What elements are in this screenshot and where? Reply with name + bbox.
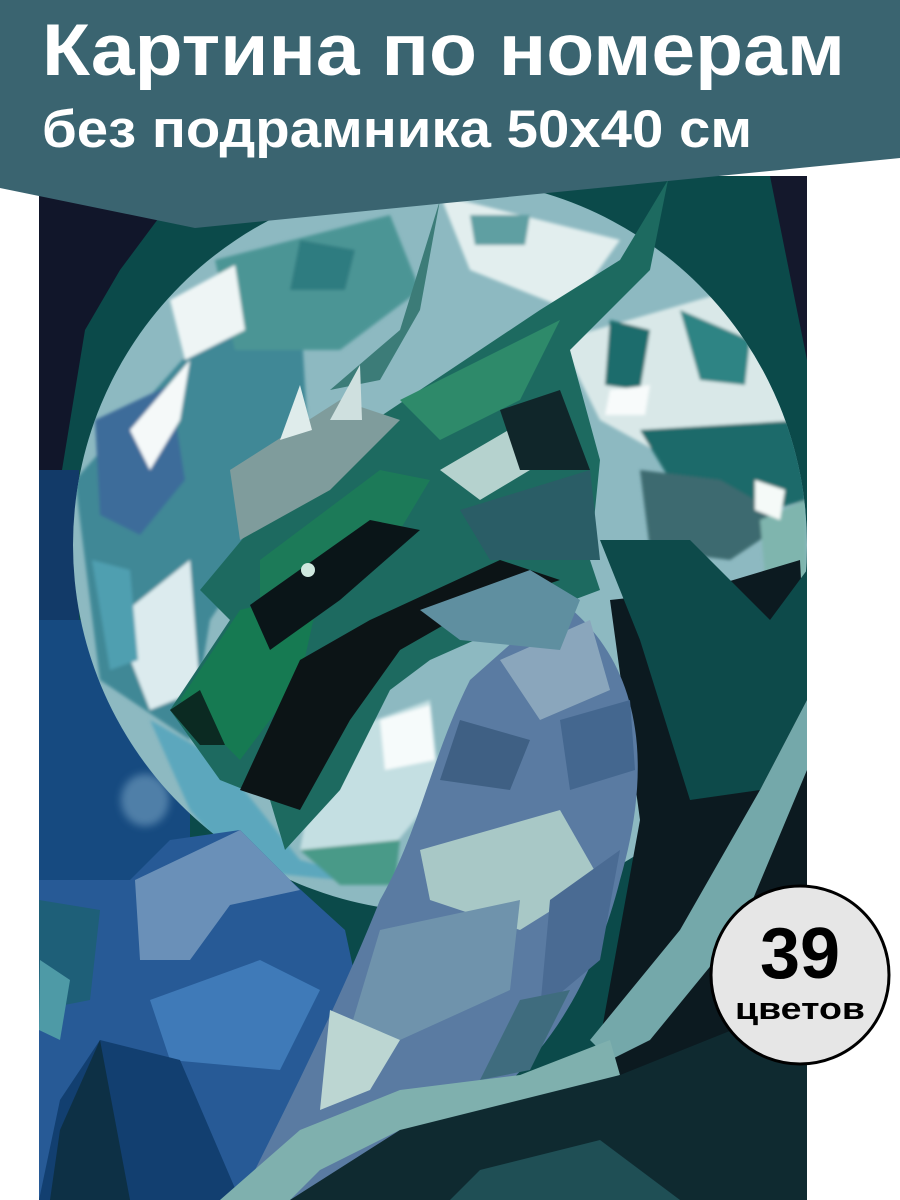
mountains <box>39 830 360 1200</box>
moon <box>73 178 807 912</box>
header banner <box>0 0 900 228</box>
badge number: 39 <box>760 914 840 994</box>
subtitle: без подрамника 50х40 см <box>42 100 752 159</box>
painting: dragon and moon <box>39 176 807 1200</box>
dragon head <box>170 180 668 850</box>
dark neck backdrop <box>602 560 807 1075</box>
badge: 39 colours <box>711 886 889 1064</box>
title: Картина по номерам <box>42 10 845 91</box>
wing <box>220 700 807 1200</box>
dragon neck <box>240 600 638 1200</box>
horn <box>330 200 440 390</box>
night sky background <box>39 176 807 1076</box>
badge label: цветов <box>735 991 865 1026</box>
